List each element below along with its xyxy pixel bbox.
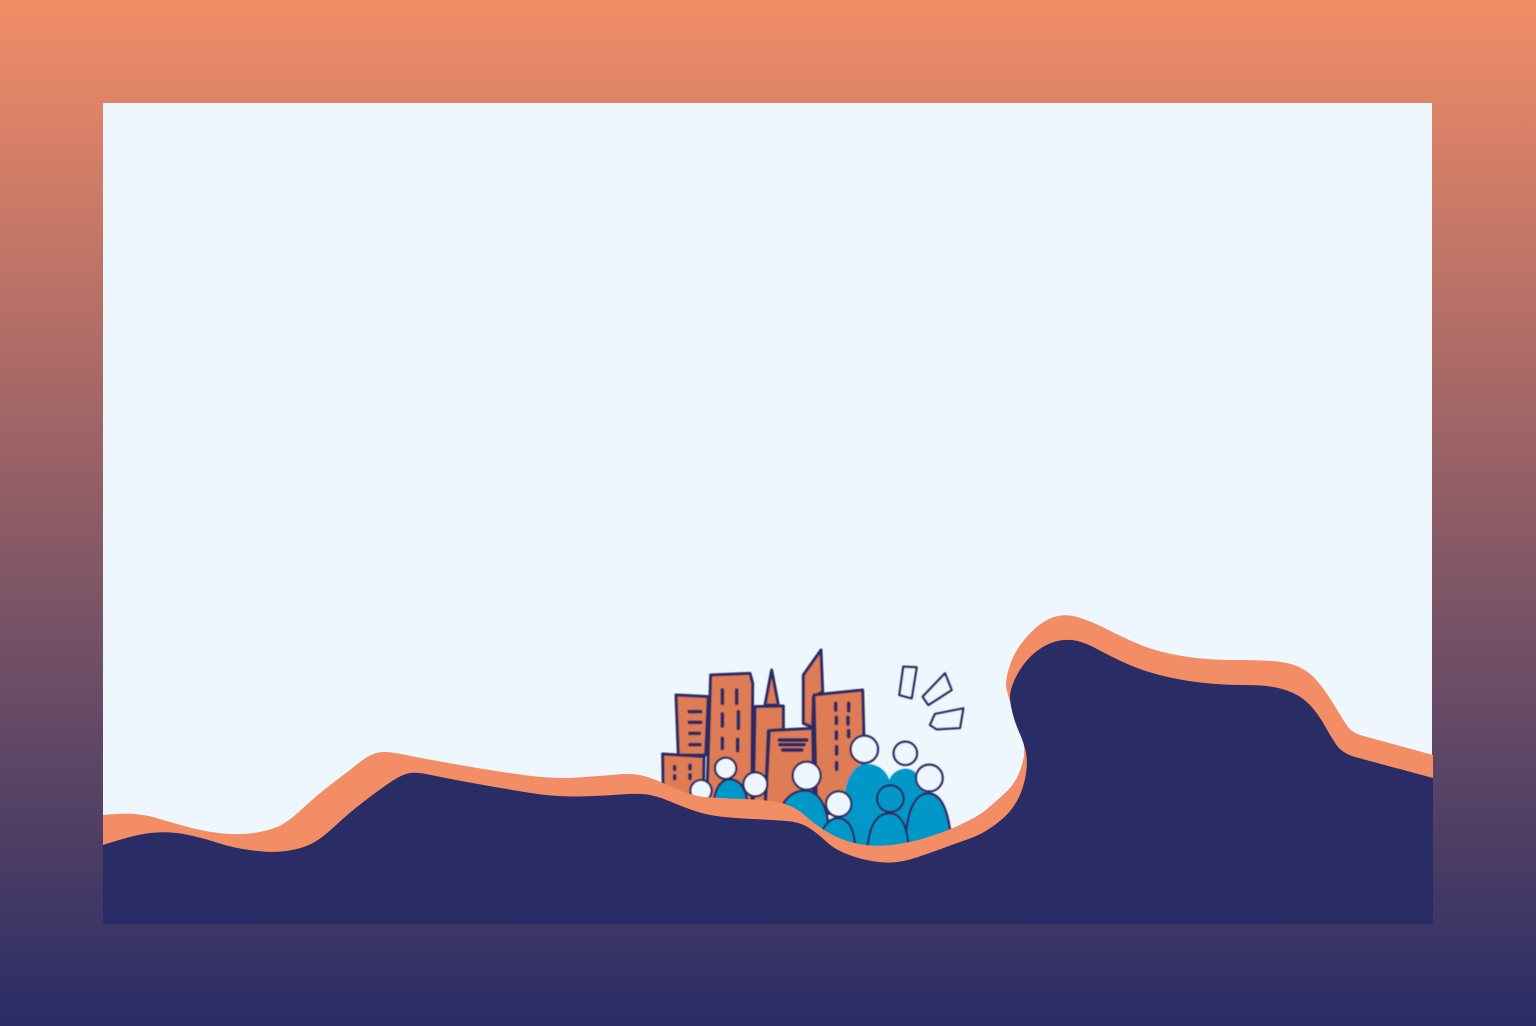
icon: buildings xyxy=(663,650,864,813)
icon: crowd of people xyxy=(690,736,953,857)
icon: flying debris xyxy=(899,667,963,729)
icon: city skyline and crowd xyxy=(663,650,963,857)
wave: orange crest xyxy=(103,615,1433,924)
panel: pale blue sky xyxy=(103,103,1432,924)
wave: navy body xyxy=(103,640,1433,924)
